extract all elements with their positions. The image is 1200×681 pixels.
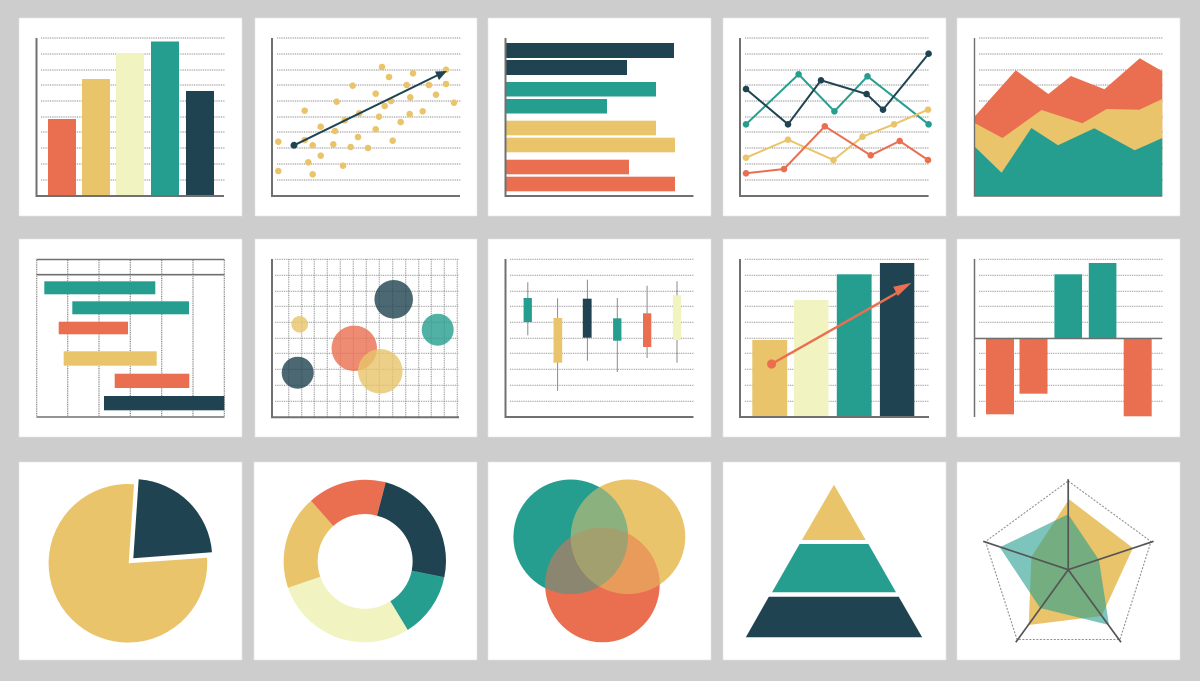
line series: navy bbox=[743, 50, 932, 128]
pie slice: large yellow bbox=[49, 484, 207, 643]
growth bars bbox=[752, 263, 914, 417]
area: teal bbox=[974, 128, 1162, 196]
venn circles bbox=[513, 480, 685, 642]
panel: venn diagram bbox=[488, 462, 711, 660]
panel: stacked area chart bbox=[957, 18, 1180, 216]
line series: teal bbox=[743, 71, 932, 128]
radar axes bbox=[983, 479, 1154, 642]
panel: multi-line chart bbox=[723, 18, 946, 216]
panel: donut chart bbox=[254, 462, 477, 660]
radar area: yellow bbox=[1029, 499, 1133, 625]
panel: pyramid chart bbox=[723, 462, 946, 660]
bars: five vertical columns bbox=[48, 42, 214, 196]
gantt bars bbox=[44, 281, 224, 410]
pyramid middle tier bbox=[772, 544, 896, 592]
pyramid bottom tier bbox=[746, 597, 922, 637]
line series: yellow bbox=[743, 106, 931, 163]
growth arrow bbox=[767, 283, 912, 369]
panel: pie chart bbox=[19, 462, 242, 660]
panel: positive and negative bar chart bbox=[957, 239, 1180, 437]
trend arrow bbox=[290, 71, 447, 149]
panel: gantt chart bbox=[19, 239, 242, 437]
panel: scatter plot with trend arrow bbox=[255, 18, 477, 216]
panel: candlestick chart bbox=[488, 239, 711, 437]
area: yellow bbox=[974, 99, 1162, 196]
diverging bars bbox=[986, 263, 1152, 416]
panel: horizontal bar chart bbox=[488, 18, 711, 216]
horizontal bars bbox=[506, 43, 675, 191]
scatter dots bbox=[275, 64, 457, 178]
pie slice: exploded navy bbox=[133, 479, 212, 558]
donut segments bbox=[284, 480, 446, 642]
bubbles bbox=[282, 280, 454, 394]
candlesticks bbox=[524, 280, 681, 391]
line series: orange bbox=[743, 123, 931, 177]
radar outline bbox=[986, 481, 1151, 640]
panel: bubble chart bbox=[255, 239, 477, 437]
panel: vertical bar chart bbox=[19, 18, 242, 216]
radar area: teal bbox=[1000, 514, 1109, 625]
panel: growth bar chart with arrow bbox=[723, 239, 946, 437]
panel: radar chart bbox=[957, 462, 1180, 660]
area: orange bbox=[974, 58, 1162, 160]
pyramid top tier bbox=[802, 485, 866, 540]
